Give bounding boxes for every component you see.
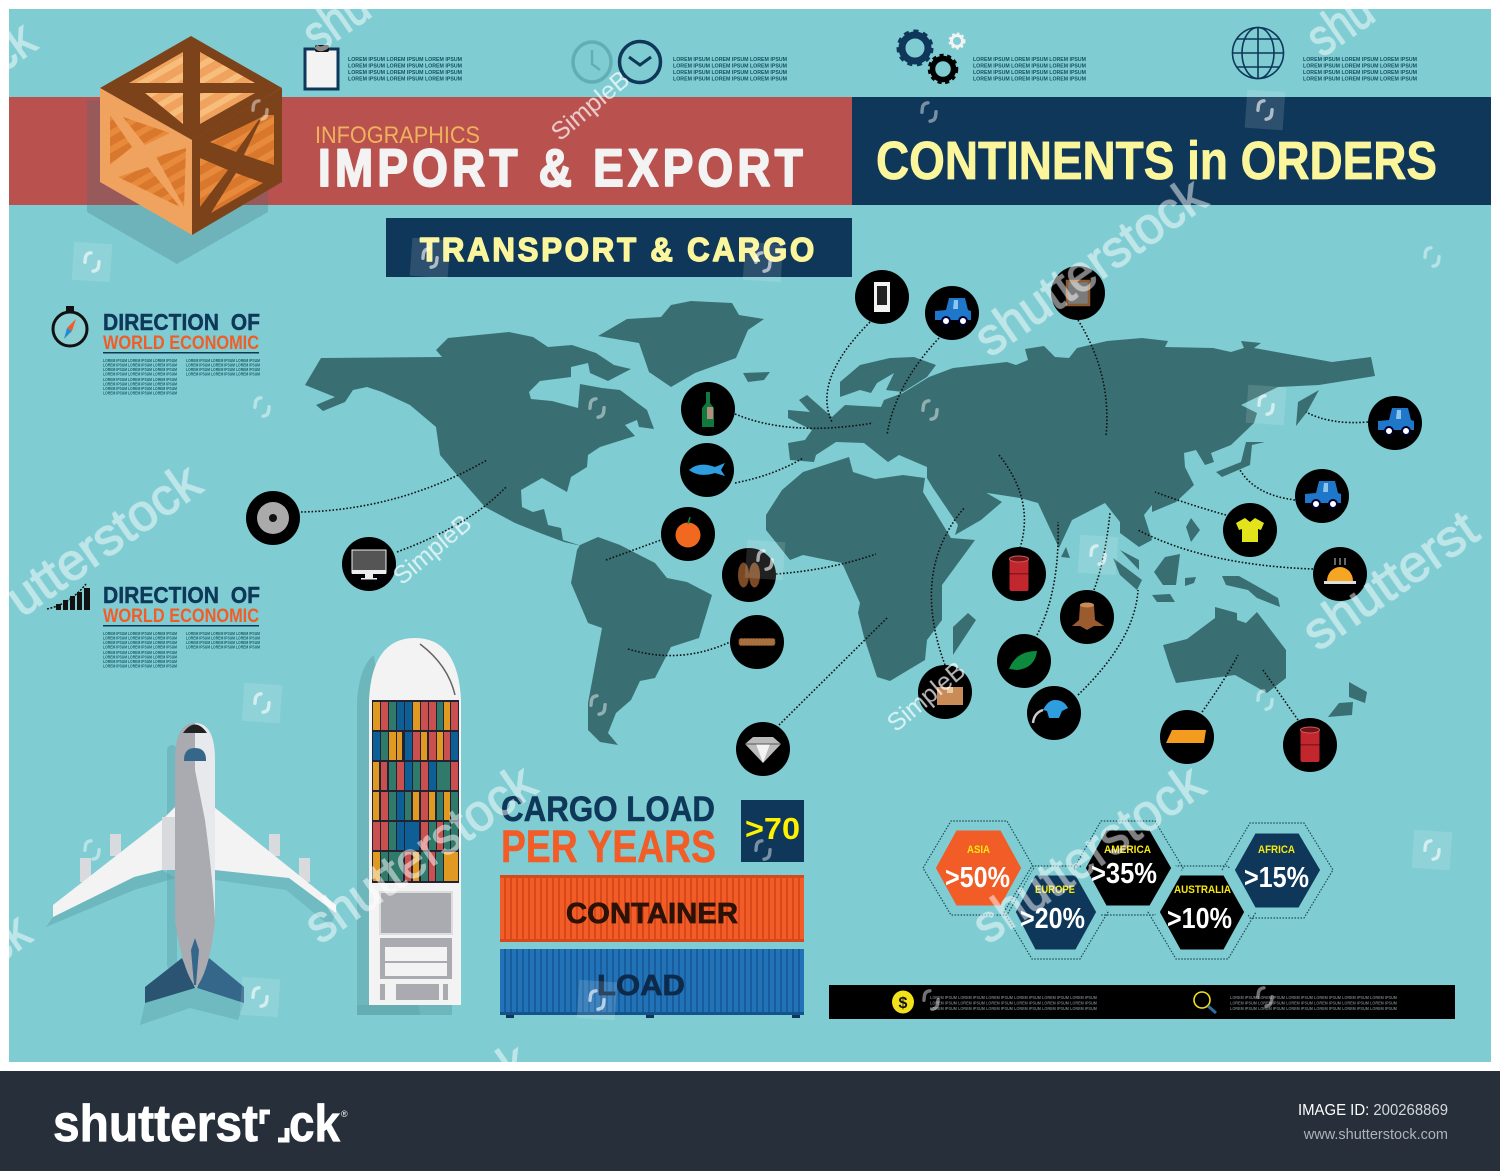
icon: clocks xyxy=(573,42,660,82)
text: legend lorem right: LOREM IPSUM LOREM IPSUM LOREM IPSUM LOREM IPSUM LOREM IPSUM LOREM IPSUM xyxy=(1230,995,1397,1000)
block: direction of world economic 1: LOREM IPSUM LOREM IPSUM LOREM IPSUM xyxy=(186,372,260,376)
footer logo: shutterst xyxy=(53,1095,258,1153)
greenland xyxy=(598,301,764,387)
icon: growth chart xyxy=(47,584,90,610)
icon: monitor xyxy=(342,537,396,591)
stat: australia: AUSTRALIA xyxy=(1174,884,1231,896)
text: clipboard lorem: LOREM IPSUM LOREM IPSUM LOREM IPSUM xyxy=(348,64,462,70)
icon: blue car east xyxy=(1368,396,1422,450)
block: direction of world economic 1: LOREM IPSUM LOREM IPSUM LOREM IPSUM xyxy=(103,382,177,386)
north america xyxy=(305,332,654,546)
watermark overlays: SimpleB xyxy=(546,65,635,147)
container stacks xyxy=(372,700,459,883)
block: direction of world economic 1: LOREM IPSUM LOREM IPSUM LOREM IPSUM xyxy=(103,367,177,372)
image id: IMAGE ID: 200268869 xyxy=(1298,1102,1448,1119)
asia pacific islands xyxy=(1061,390,1319,607)
text: gears lorem: LOREM IPSUM LOREM IPSUM LOREM IPSUM xyxy=(973,64,1086,70)
banner: transport and cargo xyxy=(386,218,852,277)
block: direction of world economic 1: LOREM IPSUM LOREM IPSUM LOREM IPSUM xyxy=(103,377,177,382)
block: direction of world economic 1: DIRECTION OF xyxy=(103,309,260,335)
block: direction of world economic 2 xyxy=(103,582,260,668)
text: legend lorem left: LOREM IPSUM LOREM IPSUM LOREM IPSUM LOREM IPSUM LOREM IPSUM LOREM IPSUM xyxy=(930,995,1097,1000)
text: legend lorem left: LOREM IPSUM LOREM IPSUM LOREM IPSUM LOREM IPSUM LOREM IPSUM LOREM IPSUM xyxy=(930,1000,1097,1006)
icon: oil barrel south xyxy=(1283,718,1337,772)
heading: cargo load per years: PER YEARS xyxy=(501,821,716,872)
text: globe lorem: LOREM IPSUM LOREM IPSUM LOREM IPSUM xyxy=(1303,64,1417,70)
block: direction of world economic 1: LOREM IPSUM LOREM IPSUM LOREM IPSUM xyxy=(186,362,260,368)
icon: blue car xyxy=(925,286,979,340)
text: clipboard lorem: LOREM IPSUM LOREM IPSUM LOREM IPSUM xyxy=(348,57,462,63)
text: clock lorem: LOREM IPSUM LOREM IPSUM LOREM IPSUM xyxy=(673,76,787,82)
block: direction of world economic 2: LOREM IPSUM LOREM IPSUM LOREM IPSUM xyxy=(186,644,260,650)
text: legend lorem left: LOREM IPSUM LOREM IPSUM LOREM IPSUM LOREM IPSUM LOREM IPSUM LOREM IPSUM xyxy=(930,1006,1097,1011)
icon: wooden crate xyxy=(87,36,282,264)
banner: transport and cargo: TRANSPORT & CARGO xyxy=(420,231,817,268)
stat: australia: >10% xyxy=(1167,903,1232,935)
stat box: greater than 70 xyxy=(741,800,804,862)
icon: yellow shirt xyxy=(1223,503,1277,557)
text: gears lorem: LOREM IPSUM LOREM IPSUM LOREM IPSUM xyxy=(973,57,1086,63)
block: direction of world economic 2: LOREM IPSUM LOREM IPSUM LOREM IPSUM xyxy=(103,659,177,664)
stat: america: >35% xyxy=(1091,858,1157,890)
stat: america: AMERICA xyxy=(1104,844,1151,856)
text: clipboard lorem: LOREM IPSUM LOREM IPSUM LOREM IPSUM xyxy=(348,70,462,76)
text: gears lorem: LOREM IPSUM LOREM IPSUM LOREM IPSUM xyxy=(973,70,1086,76)
heading: import and export: IMPORT & EXPORT xyxy=(318,139,807,198)
footer logo: ® xyxy=(341,1109,348,1119)
illustration: airplane xyxy=(46,723,336,1025)
stat: africa: >15% xyxy=(1244,862,1309,894)
block: direction of world economic 1: LOREM IPSUM LOREM IPSUM LOREM IPSUM xyxy=(103,358,177,363)
text: clipboard lorem: LOREM IPSUM LOREM IPSUM LOREM IPSUM xyxy=(348,76,462,82)
panel: red title band xyxy=(9,97,852,205)
heading: infographics: INFOGRAPHICS xyxy=(315,122,480,149)
icon: coffee beans xyxy=(722,548,776,602)
text: legend lorem right xyxy=(1230,995,1397,1011)
icon: orange fruit xyxy=(661,507,715,561)
icon: magnifier xyxy=(1194,992,1216,1013)
stat box: greater than 70: >70 xyxy=(745,811,800,846)
container: blue xyxy=(500,949,804,1018)
block: direction of world economic 2: LOREM IPSUM LOREM IPSUM LOREM IPSUM xyxy=(103,631,177,636)
stat: america xyxy=(1083,828,1174,908)
text: globe lorem xyxy=(1303,57,1417,82)
madagascar xyxy=(953,613,976,655)
stat: asia: >50% xyxy=(945,862,1010,894)
block: direction of world economic 2: LOREM IPSUM LOREM IPSUM LOREM IPSUM xyxy=(186,636,260,640)
australia xyxy=(1163,607,1286,693)
text: clock lorem: LOREM IPSUM LOREM IPSUM LOREM IPSUM xyxy=(673,70,787,76)
block: direction of world economic 2: LOREM IPSUM LOREM IPSUM LOREM IPSUM xyxy=(103,636,177,640)
stat: africa xyxy=(1232,831,1323,910)
block: direction of world economic 2: DIRECTION OF xyxy=(103,582,260,608)
watermark overlays: shutterstock xyxy=(964,166,1217,368)
icon: parcel box xyxy=(918,665,972,719)
watermark overlays: SimpleB xyxy=(388,509,477,591)
block: direction of world economic 1: LOREM IPSUM LOREM IPSUM LOREM IPSUM xyxy=(103,386,177,391)
stat: australia xyxy=(1157,873,1247,952)
icon: clipboard xyxy=(305,45,338,89)
text: clock lorem: LOREM IPSUM LOREM IPSUM LOREM IPSUM xyxy=(673,64,787,70)
block: direction of world economic 2: LOREM IPSUM LOREM IPSUM LOREM IPSUM xyxy=(103,644,177,650)
block: direction of world economic 2: LOREM IPSUM LOREM IPSUM LOREM IPSUM xyxy=(186,631,260,636)
icon: fish xyxy=(680,443,734,497)
container: orange xyxy=(500,875,804,942)
dotted trade routes xyxy=(301,320,1368,725)
icon: compass xyxy=(53,306,87,346)
website: www.shutterstock.com xyxy=(1303,1127,1448,1143)
text: globe lorem: LOREM IPSUM LOREM IPSUM LOREM IPSUM xyxy=(1303,76,1417,82)
panel: navy title band xyxy=(852,97,1491,205)
block: direction of world economic 1: LOREM IPSUM LOREM IPSUM LOREM IPSUM xyxy=(103,362,177,368)
text: legend lorem right: LOREM IPSUM LOREM IPSUM LOREM IPSUM LOREM IPSUM LOREM IPSUM LOREM IPSUM xyxy=(1230,1006,1397,1011)
text: gears lorem: LOREM IPSUM LOREM IPSUM LOREM IPSUM xyxy=(973,76,1086,82)
block: direction of world economic 1: WORLD ECONOMIC xyxy=(103,332,259,354)
watermark overlays: SimpleB xyxy=(882,656,971,738)
icon: leaf xyxy=(997,634,1051,688)
block: direction of world economic 1: LOREM IPSUM LOREM IPSUM LOREM IPSUM xyxy=(103,372,177,376)
iceland xyxy=(743,372,770,382)
icon: fuel nozzle xyxy=(1027,686,1081,740)
eurasia xyxy=(788,338,1375,548)
block: direction of world economic 2: LOREM IPSUM LOREM IPSUM LOREM IPSUM xyxy=(103,664,177,668)
world map xyxy=(305,301,1375,745)
white strip under artwork xyxy=(0,1062,1500,1071)
icon: gears xyxy=(898,32,964,82)
new zealand xyxy=(1328,682,1367,717)
block: direction of world economic 1: LOREM IPSUM LOREM IPSUM LOREM IPSUM xyxy=(103,390,177,396)
watermark overlays: utterstock xyxy=(0,452,212,628)
stat: asia: ASIA xyxy=(967,844,990,856)
block: direction of world economic 2: LOREM IPSUM LOREM IPSUM LOREM IPSUM xyxy=(103,650,177,655)
africa xyxy=(766,457,975,681)
icon: wood log xyxy=(730,615,784,669)
watermark overlays: k xyxy=(488,1032,541,1094)
icon: dollar coin xyxy=(892,990,914,1014)
icon: wine bottle xyxy=(681,382,735,436)
text: legend lorem left xyxy=(930,995,1097,1011)
container: orange: CONTAINER xyxy=(566,898,738,930)
text: clipboard lorem xyxy=(348,57,462,82)
icon: crate box xyxy=(1051,266,1105,320)
icon: globe xyxy=(1232,27,1284,79)
icon: tree stump xyxy=(1060,590,1114,644)
scandinavia xyxy=(840,357,936,397)
icon: phone xyxy=(855,270,909,324)
icon: food tray xyxy=(1313,547,1367,601)
heading: cargo load per years: CARGO LOAD xyxy=(501,790,715,829)
icon: dollar coin: $ xyxy=(899,995,908,1012)
container: blue: LOAD xyxy=(597,970,685,1002)
block: direction of world economic 1 xyxy=(103,309,260,396)
text: globe lorem: LOREM IPSUM LOREM IPSUM LOREM IPSUM xyxy=(1303,57,1417,63)
dotted hexagon outlines xyxy=(923,821,1333,959)
text: clock lorem: LOREM IPSUM LOREM IPSUM LOREM IPSUM xyxy=(673,57,787,63)
stat: europe: EUROPE xyxy=(1035,884,1075,896)
south america xyxy=(571,537,712,745)
watermark overlays: shutterst xyxy=(1292,499,1489,662)
stat: africa: AFRICA xyxy=(1258,844,1295,856)
illustration: cargo ship xyxy=(357,638,461,1015)
text: gears lorem xyxy=(973,57,1086,82)
block: direction of world economic 2: LOREM IPSUM LOREM IPSUM LOREM IPSUM xyxy=(103,640,177,645)
icon: gold bar xyxy=(1160,710,1214,764)
stat: asia xyxy=(933,828,1024,908)
watermark overlays: shutterstock xyxy=(962,753,1215,955)
stat: europe xyxy=(1013,873,1099,952)
block: direction of world economic 2: LOREM IPSUM LOREM IPSUM LOREM IPSUM xyxy=(103,654,177,660)
heading: cargo load per years xyxy=(501,790,716,872)
stat: europe: >20% xyxy=(1020,903,1085,935)
footer bar: black legend strip xyxy=(829,985,1455,1019)
text: clock lorem xyxy=(673,57,787,82)
icon: oil barrel xyxy=(992,547,1046,601)
block: direction of world economic 2: LOREM IPSUM LOREM IPSUM LOREM IPSUM xyxy=(186,640,260,645)
text: globe lorem: LOREM IPSUM LOREM IPSUM LOREM IPSUM xyxy=(1303,70,1417,76)
watermark overlays: shutterstock xyxy=(294,753,547,955)
footer logo: ck xyxy=(289,1095,340,1153)
icon: blue car japan xyxy=(1295,469,1349,523)
block: direction of world economic 1: LOREM IPSUM LOREM IPSUM LOREM IPSUM xyxy=(186,367,260,372)
block: direction of world economic 1: LOREM IPSUM LOREM IPSUM LOREM IPSUM xyxy=(186,358,260,363)
icon: tire xyxy=(246,491,300,545)
footer: shutterstock bar xyxy=(0,1071,1500,1171)
icon: diamond xyxy=(736,722,790,776)
block: direction of world economic 2: WORLD ECONOMIC xyxy=(103,605,259,627)
text: legend lorem right: LOREM IPSUM LOREM IPSUM LOREM IPSUM LOREM IPSUM LOREM IPSUM LOREM IPSUM xyxy=(1230,1000,1397,1006)
